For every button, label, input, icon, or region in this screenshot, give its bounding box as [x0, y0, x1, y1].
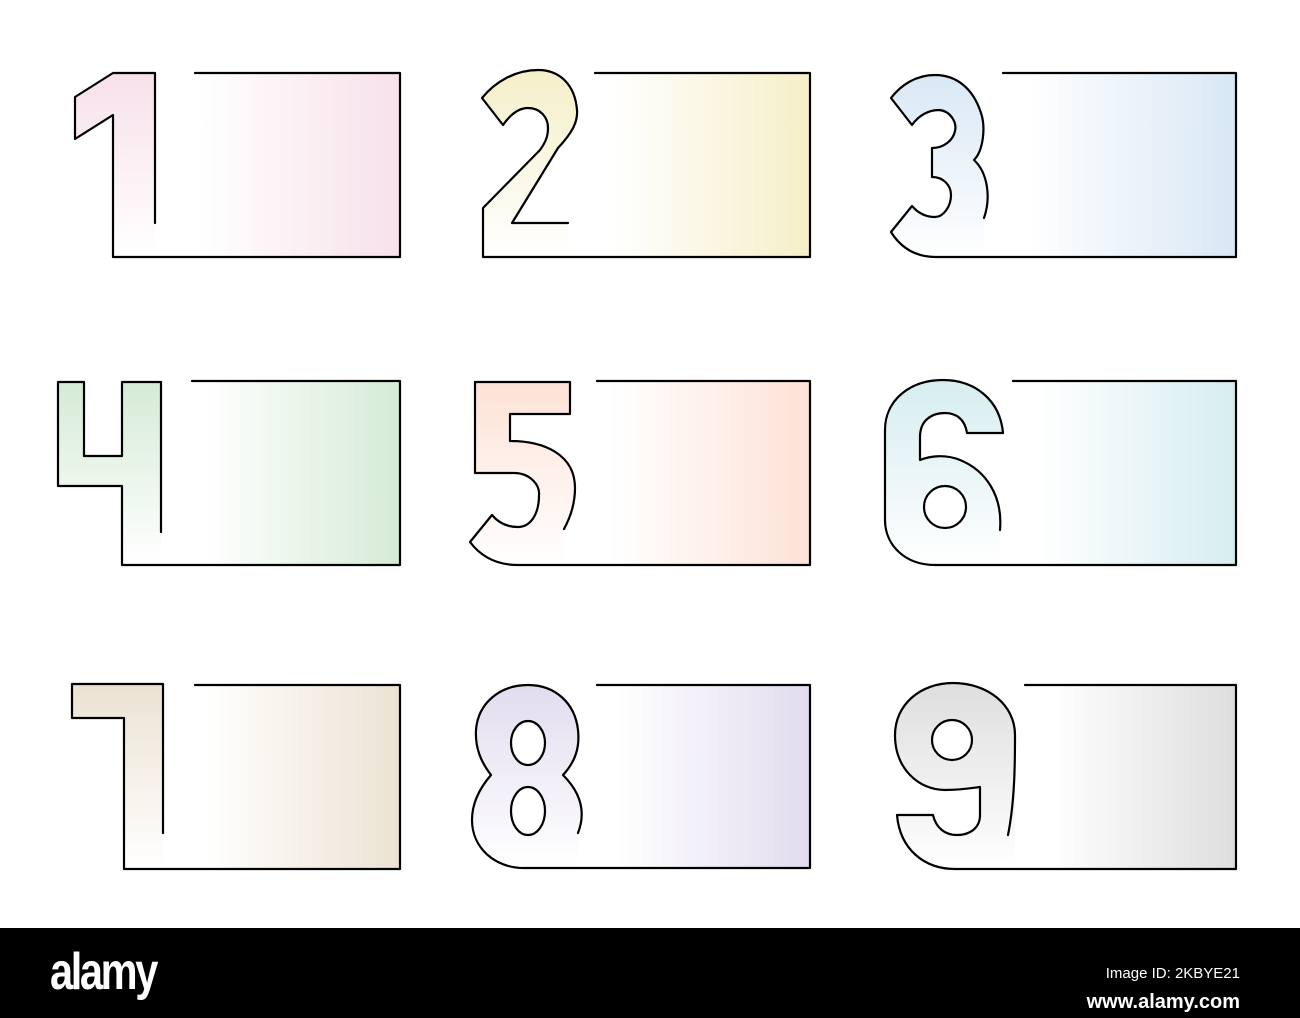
digit 1 [75, 73, 155, 257]
footer bar [0, 928, 1300, 1018]
digit 6 [885, 380, 1003, 565]
digit 5 [470, 382, 575, 565]
footer image id: Image ID: 2KBYE21 [1106, 965, 1240, 982]
panel 3 [891, 73, 1236, 257]
panel 8 [472, 685, 810, 869]
panel 7 [72, 684, 400, 869]
footer logo: alamy [50, 943, 156, 1001]
digit 8 [472, 685, 582, 868]
panel 4 [58, 381, 400, 565]
panel 9 [895, 683, 1236, 869]
panel 5 [470, 381, 810, 565]
digit 3 [891, 73, 1236, 257]
digit 9 [895, 683, 1015, 869]
footer image id: www.alamy.com [1087, 991, 1240, 1013]
footer image id [1086, 965, 1240, 1013]
panel 6 [885, 380, 1236, 565]
digit 7 [72, 684, 163, 869]
panel 2 [482, 70, 810, 257]
panel 1 [75, 73, 400, 257]
digit 2 [482, 70, 577, 257]
digit 4 [58, 382, 161, 565]
